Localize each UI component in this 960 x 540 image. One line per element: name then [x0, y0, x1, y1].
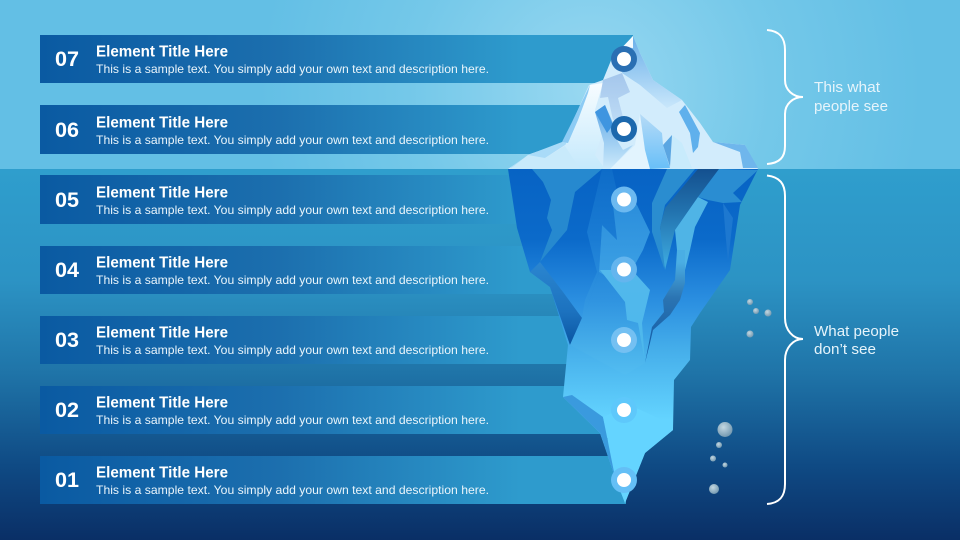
marker 07: [611, 46, 637, 72]
row 01 bar: This is a sample text. You simply add your own text and description here.: [96, 483, 489, 497]
row 04 bar: [40, 246, 560, 294]
row 02 bar: This is a sample text. You simply add your own text and description here.: [96, 413, 489, 427]
marker 04: [611, 256, 637, 282]
row 07 bar: [40, 35, 633, 83]
row 04 bar: This is a sample text. You simply add your own text and description here.: [96, 273, 489, 287]
row 04 bar: 04: [55, 259, 79, 282]
label: what people don't see: What people: [814, 323, 899, 340]
bubbles upper: [746, 299, 772, 338]
marker 02: [611, 397, 637, 423]
row 06 bar: Element Title Here: [96, 114, 228, 132]
row 01 bar: Element Title Here: [96, 464, 228, 482]
marker 03: [611, 327, 637, 353]
brace: below water: [767, 176, 803, 504]
bubbles lower: [709, 422, 732, 494]
iceberg lower light section: [563, 395, 673, 503]
row 02 bar: Element Title Here: [96, 394, 228, 412]
row 04 bar: Element Title Here: [96, 254, 228, 272]
row 05 bar: This is a sample text. You simply add your own text and description here.: [96, 203, 489, 217]
row 01 bar: [40, 456, 626, 504]
row 06 bar: 06: [55, 119, 79, 142]
label: this what people see: people see: [814, 98, 888, 115]
row 02 bar: [40, 386, 610, 434]
background: sky: [0, 0, 960, 169]
row 02 bar: 02: [55, 399, 79, 422]
row 07 bar: This is a sample text. You simply add your own text and description here.: [96, 62, 489, 76]
label: what people don't see: don’t see: [814, 341, 876, 358]
row 03 bar: 03: [55, 329, 79, 352]
iceberg above water: [508, 36, 758, 169]
marker 01: [611, 467, 637, 493]
row 03 bar: [40, 316, 580, 364]
marker 06: [611, 116, 637, 142]
label: what people don't see: [814, 323, 899, 358]
marker 05: [611, 186, 637, 212]
label: this what people see: [814, 79, 888, 115]
iceberg below water: [508, 169, 758, 503]
row 01 bar: 01: [55, 469, 79, 492]
row 05 bar: [40, 175, 560, 224]
row 05 bar: 05: [55, 189, 79, 212]
row 03 bar: This is a sample text. You simply add your own text and description here.: [96, 343, 489, 357]
background: water: [0, 169, 960, 540]
row 05 bar: Element Title Here: [96, 184, 228, 202]
row 03 bar: Element Title Here: [96, 324, 228, 342]
label: this what people see: This what: [814, 79, 881, 96]
row 07 bar: 07: [55, 48, 79, 71]
row 07 bar: Element Title Here: [96, 44, 228, 60]
brace: above water: [767, 30, 803, 164]
row 06 bar: This is a sample text. You simply add your own text and description here.: [96, 133, 489, 147]
row 06 bar: [40, 105, 600, 154]
